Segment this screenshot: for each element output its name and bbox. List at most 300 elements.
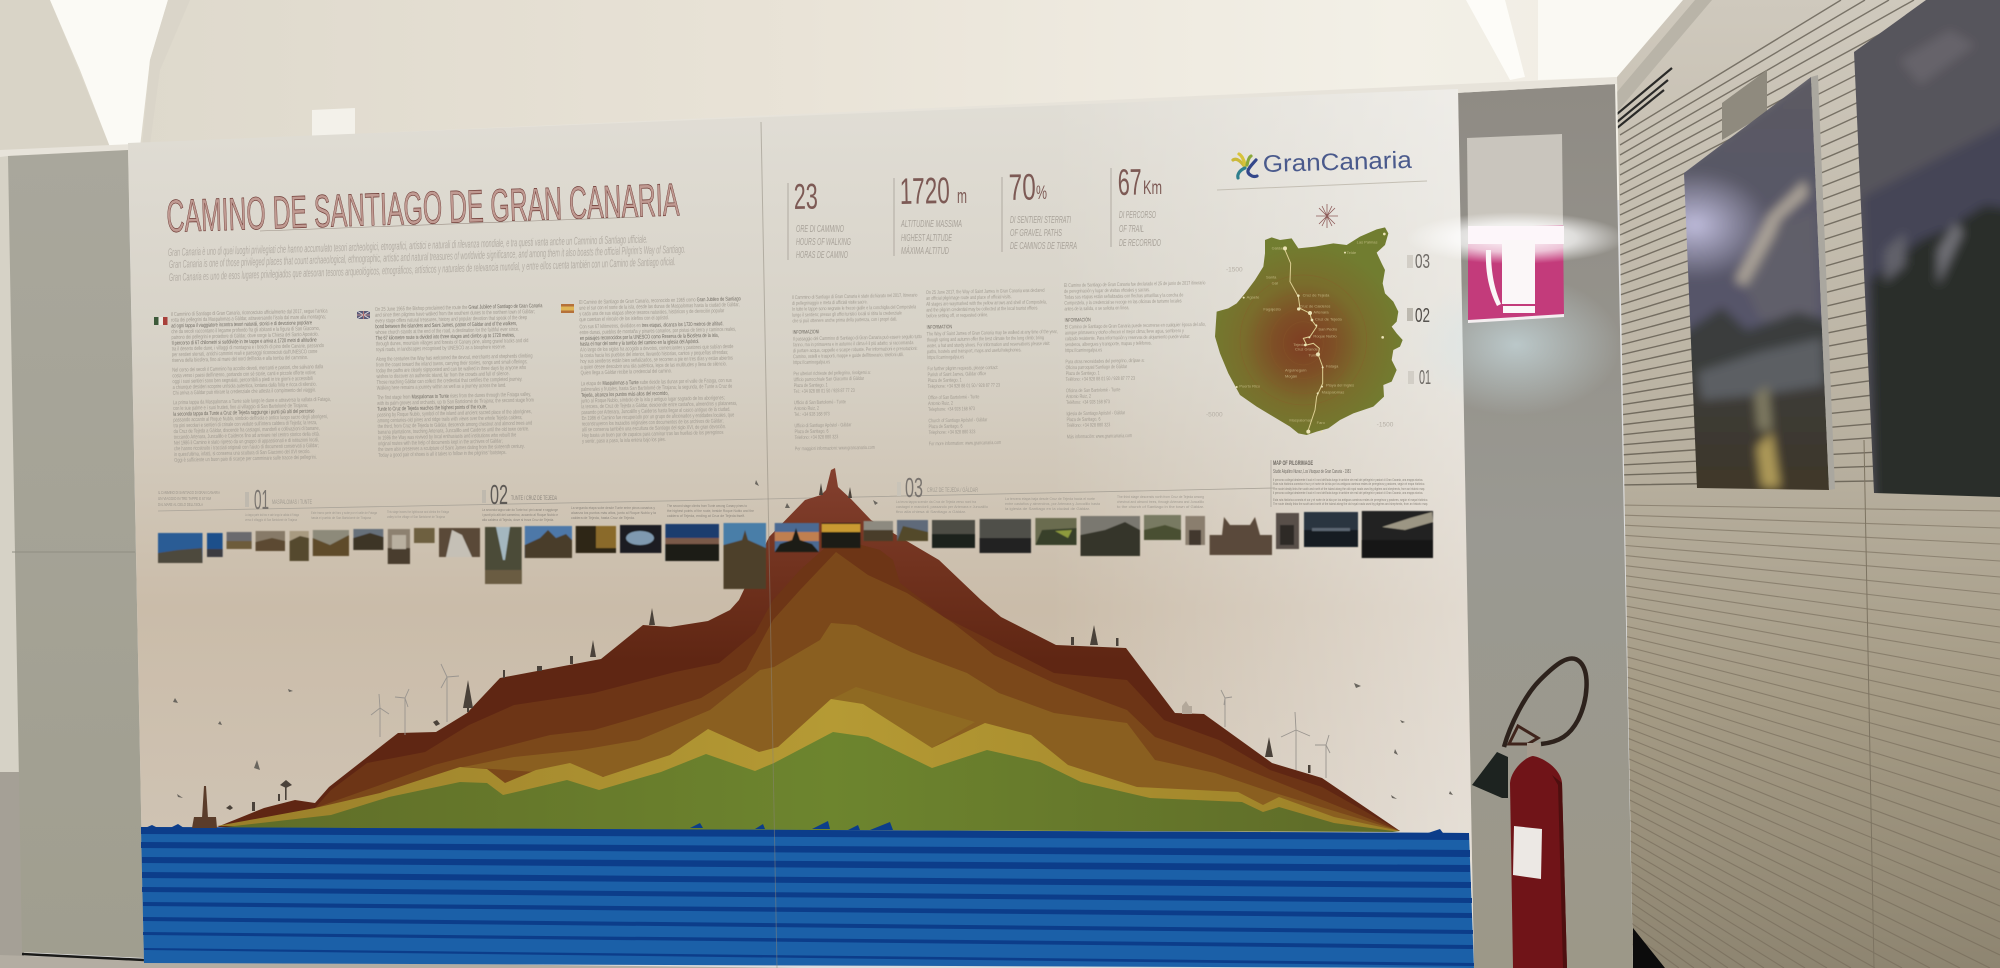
text column: info Italian: Tel.: +34 928 168 973 <box>794 411 830 417</box>
marker 01: 01 <box>1419 367 1431 389</box>
label <box>1513 826 1542 879</box>
photo 21 <box>932 520 975 548</box>
layer: brown band 2 <box>315 538 1400 831</box>
place names: Tunte <box>1308 353 1319 358</box>
text column: Spanish: La etapa de Maspalomas a Tunte sube desde las dunas por el valle de Fataga, con sus <box>581 378 732 388</box>
place names: Arguineguín <box>1285 368 1306 373</box>
place names: Mogán <box>1285 373 1297 378</box>
credits block: map of pilgrimage: The route ideally links the south and north of the island along the old royal roads used by pilgrims and shepherds, from an historic map. <box>1273 502 1428 506</box>
stage 01 header: verso il villaggio di San Bartolomé de Tirajana <box>245 518 297 522</box>
text column: info English: before setting off, or requested online. <box>926 312 988 319</box>
text column: English: In 1986 the Way was revived by local enthusiasts and institutions who rebuilt the <box>378 432 517 442</box>
text column: info Spanish: Oficina de San Bartolomé - Tunte <box>1066 387 1121 393</box>
text column: info Italian: Telefono: +34 928 880 323 <box>795 434 839 440</box>
place names: Agaete <box>1247 294 1260 299</box>
stage 02 header: alcanza los puntos más altos, junto al Roque Nublo y la <box>571 511 656 515</box>
stat: 23 hours of walking: HOURS OF WALKING <box>796 237 851 248</box>
cylinder body <box>1510 756 1567 968</box>
text column: info Spanish: calzado resistente. Para información y reservas de alojamiento puede visitar: <box>1065 333 1190 341</box>
text column: Spanish: y sentir, paso a paso, la isla entera bajo los pies. <box>582 436 666 445</box>
text column: Spanish: Tejeda, alcanza los puntos más altos del recorrido, <box>581 390 669 399</box>
photo 2 <box>207 533 223 557</box>
stat: 1720 m highest altitude: HIGHEST ALTITUDE <box>901 233 952 244</box>
text column: info English: On 25 June 2017, the Way of Saint James in Gran Canaria was declared <box>926 287 1045 295</box>
painting: left canvas <box>1684 75 1835 490</box>
stage 03 header: The third stage descends north from Cruz de Tejeda among <box>1117 495 1204 499</box>
stat: 1720 m highest altitude: 1720 <box>899 170 950 212</box>
text column: info English: Telephone: +34 928 88 01 50 / 928 87 77 23 <box>928 382 1001 389</box>
place names: Santa <box>1266 274 1277 279</box>
text column: info Spanish: Iglesia de Santiago Apóstol - Gáldar <box>1066 410 1126 416</box>
stage 03 header: la iglesia de Santiago en la ciudad de Gáldar. <box>1005 507 1090 511</box>
waves <box>145 821 1443 833</box>
text column: Spanish: entre dunas, pueblos de montaña y pinares canarios, por pistas de tierra y caminos reales, <box>580 326 736 337</box>
trees and figures on the ridge <box>226 483 1310 811</box>
text column: info English: though spring and autumn offer the best climate for the long climb; bring <box>927 335 1044 343</box>
text column: Italian: Il Cammino di Santiago di Gran Canaria, riconosciuto ufficialmente dal 2017, segue l'antica <box>171 308 328 318</box>
text column: Spanish: palmerales y frutales, hasta San Bartolomé de Tirajana; la segunda, de Tunte a Cruz de <box>581 383 733 393</box>
text column: Spanish: junto al Roque Nublo, símbolo de la isla y antiguo lugar sagrado de los aborígenes; <box>580 395 725 405</box>
text column: Spanish: Hoy basta un buen par de zapatos para caminar tras las huellas de los peregrinos <box>582 429 724 439</box>
photo 24 <box>1080 516 1140 556</box>
credits block: map of pilgrimage: Il percorso collega idealmente il sud e il nord dell'isola lungo le antiche vie reali dei pellegrini e pastori di Gran Canaria, una mappa storica. <box>1273 491 1423 495</box>
text column: Spanish: une el sur con el norte de la isla, desde las dunas de Maspalomas hasta la ciudad de Gáldar, <box>579 302 740 312</box>
photo 6 <box>313 530 349 556</box>
intro text: three languages: Gran Canaria es uno de esos lugares privilegiados que atesoran tesoros arqueológicos, etnográficos, artísticos y naturales de relevancia mundial, y entre ellos cuenta también con un Camino de Santiago oficial. <box>169 256 676 284</box>
text column: Spanish: la tercera, de Cruz de Tejeda a Gáldar, desciende entre castaños, almendros y plataneras, <box>581 400 737 411</box>
text column: Spanish: Quien llega a Gáldar recibe la credencial del camino. <box>580 368 672 377</box>
panel seam <box>761 122 777 968</box>
place names: Telde <box>1347 250 1357 255</box>
text column: Italian: toccando Artenara, Juncalillo e Caideros fino ad arrivare nel centro storico della città. <box>174 431 320 441</box>
stage 03 header: to the church of Santiago in the town of Gáldar. <box>1117 505 1204 509</box>
canvas side edge <box>1811 75 1835 490</box>
photo 30 <box>1362 511 1433 558</box>
flag: Spain <box>561 304 574 313</box>
text column: Italian: per sentieri sterrati, antichi cammini reali e paesaggi riconosciuti dall'UNESCO come <box>172 348 318 359</box>
photo 19 <box>864 521 893 541</box>
place names: Cruz Grande <box>1295 347 1319 352</box>
text column: English: passing by Roque Nublo, symbol of the island and ancient sacred place of the aborigines, <box>377 408 532 419</box>
place names: Puerto Rico <box>1239 384 1261 389</box>
place names: Tejeda <box>1293 342 1306 347</box>
right slatted wall <box>1615 0 2000 968</box>
photo 22 <box>980 519 1031 553</box>
text column: info English: INFORMATION <box>927 324 952 330</box>
photo 12 <box>525 526 572 558</box>
stage 02 header: La segunda etapa sube desde Tunte entre pinos canarios y <box>571 506 655 510</box>
stage 02 header: La seconda tappa sale da Tunte tra i pini canari e raggiunge <box>482 508 558 512</box>
stage 02 header: 02 <box>490 479 508 510</box>
timeline intro text: UN VIAGGIO IN TRE TAPPE E 67 KM <box>158 496 211 501</box>
text column: Italian: costa verso i paesi dell'interno, portando con sé storie, canti e piccole offerte votive; <box>172 370 316 380</box>
stage 03 header: CRUZ DE TEJEDA / GÁLDAR <box>927 487 978 494</box>
text column: info English: Office of San Bartolomé - Tunte <box>928 394 980 400</box>
stage 02 header: i punti più alti del cammino, accanto al Roque Nublo e <box>482 513 558 517</box>
text column: Italian: ad ogni tappa il viaggiatore incontra tesori naturali, storici e di devozione popolare <box>171 320 312 330</box>
text column: info Italian: Per ulteriori richieste del pellegrino, rivolgersi a: <box>793 369 871 377</box>
text column: Italian: La prima tappa da Maspalomas a Tunte sale lungo le dune e attraversa la vallata di Fataga, <box>173 396 331 407</box>
stage 02 header: caldera de Tejeda, hasta Cruz de Tejeda. <box>571 516 635 520</box>
text column: English: royal roads, in landscapes recognised by UNESCO as a biosphere reserve. <box>376 344 506 354</box>
wind turbines <box>371 664 1330 778</box>
stat: 67 km of trail: DI PERCORSO <box>1119 210 1156 221</box>
place names: San Pedro <box>1318 327 1338 332</box>
place names: Roque Nublo <box>1313 333 1337 338</box>
credits block: map of pilgrimage: MAP OF PILGRIMAGE <box>1273 461 1313 467</box>
text column: info English: Telephone: +34 928 168 973 <box>928 406 975 412</box>
stage 03 header: castagni e mandorli, passando per Artenara e Juncalillo <box>896 505 988 509</box>
layer: brown band 4 <box>463 623 1400 831</box>
text column: info Italian: Ufficio di Santiago Apóstol - Gáldar <box>794 422 852 428</box>
photo 27 <box>1210 517 1272 555</box>
horn <box>1472 752 1508 798</box>
text column: Spanish: allí se conserva también una escultura de Santiago del siglo XVI, de gran devoción. <box>582 424 726 434</box>
text column: Italian: con le sue palme e i suoi frutteti, fino al villaggio di San Bartolomé de Tirajana; <box>173 402 308 412</box>
text column: info Italian: In tutte le tappe sono segnate le frecce gialle e la conchiglia del Compostela <box>792 304 917 312</box>
photo 10 <box>439 528 480 557</box>
text column: Italian: rotta dei pellegrini da Maspalomas a Gáldar, attraversando l'isola dal mare alla montagna; <box>171 314 326 324</box>
text column: info Italian: che si può ottenere anche prima della partenza, con i propri dati. <box>792 316 897 324</box>
credits block: map of pilgrimage <box>1271 460 1428 507</box>
stage 03 header: entre castaños y almendros, por Artenara y Juncalillo hasta <box>1005 502 1100 506</box>
church on the ridge <box>1182 701 1192 714</box>
stage 01 header: La tappa parte dal faro e sale lungo la vallata di Fataga <box>245 513 299 517</box>
intro text: three languages: Gran Canaria is one of those privileged places that count archaeological, ethnographic, artistic and natural treasures of worldwide significance, and among them it also boasts the official Pilgrim's Way of Santiago. <box>169 244 686 271</box>
text column: English: Tunte to Cruz de Tejeda reaches the highest points of the route, <box>377 404 487 413</box>
text column: Italian: Chi arriva a Gáldar può ritirare la credenziale che attesta il compimento del viaggio. <box>173 387 316 397</box>
text column: Spanish: hoy sus senderos están bien señalizados, se recorren a pie en tres días y están abiertos <box>580 355 734 365</box>
stage markers <box>1407 251 1431 389</box>
island map <box>1206 227 1403 435</box>
text column: English: with its palm groves and orchards, up to San Bartolomé de Tirajana; the second stage from <box>377 397 534 407</box>
photo 28 <box>1276 513 1299 549</box>
stat: 23 hours of walking: 23 <box>793 176 818 217</box>
place names: Playa del Inglés <box>1326 383 1354 388</box>
stage 01 header: MASPALOMAS / TUNTE <box>272 500 312 506</box>
text column: Italian: Oggi è sufficiente un buon paio di scarpe per camminare sulle tracce dei pellegrini. <box>174 454 317 464</box>
mountain profile chart <box>217 468 1400 832</box>
text column: info English: The Way of Saint James of Gran Canaria may be walked at any time of the year, <box>927 328 1058 337</box>
text column: info English: an official pilgrimage route and place of official visits. <box>926 294 1012 301</box>
marker 03: 03 <box>1415 251 1430 273</box>
credits block: map of pilgrimage: Il percorso collega idealmente il sud e il nord dell'isola lungo le antiche vie reali dei pellegrini e pastori di Gran Canaria, una mappa storica. <box>1273 478 1423 482</box>
text column: info Italian: di portare acqua, cappello e scarpe robuste. Per informazioni e prenotazioni: <box>793 345 918 353</box>
text column: info Spanish: Más información: www.grancanaria.com <box>1067 433 1132 440</box>
photo strip <box>158 511 1433 589</box>
photo 29 <box>1304 512 1358 547</box>
stage 01 header: hasta el pueblo de San Bartolomé de Tirajana <box>311 516 371 520</box>
stage 02 header: TUNTE / CRUZ DE TEJEDA <box>511 496 557 502</box>
text column: English: through dunes, mountain villages and forests of Canary pine, along gravel tracks and old <box>376 337 529 348</box>
extinguisher pictogram <box>1486 240 1535 313</box>
stat: 1720 m highest altitude: m <box>957 186 967 208</box>
text column: English <box>375 303 547 459</box>
text column: info English: and the pilgrim credential may be collected at the local tourist offices <box>926 305 1038 313</box>
text column: info Italian: Il Cammino di Santiago di Gran Canaria è stato dichiarato nel 2017, Itinerario <box>792 292 918 300</box>
text column: English: wishes to discover an authentic island, far from the crowds and full of silence. <box>376 371 510 380</box>
text column: Italian: Il percorso di 67 chilometri si suddivide in tre tappe e arriva a 1720 metri di altitudine <box>172 337 317 347</box>
icon: swirl <box>1233 154 1257 178</box>
text column: info Italian: Camino, ostelli e trasporti, mappe e guide dell'itinerario, telefoni utili. <box>793 351 904 359</box>
icon: compass rose <box>1316 204 1338 228</box>
sea depth labels: -1500 <box>1377 422 1394 429</box>
text column: info Italian: Per maggiori informazioni: www.grancanaria.com <box>795 444 875 452</box>
text column: Spanish: que cuentan el vínculo de los isleños con el apóstol. <box>579 315 669 324</box>
text column: info Italian: Il passaggio del Cammino di Santiago di Gran Canaria può essere seguito tutto <box>793 333 922 342</box>
hose <box>1504 658 1587 747</box>
text column: Spanish: hasta el mar del norte y la tumba del camino en la iglesia del Apóstol. <box>580 338 700 348</box>
title underline <box>260 217 640 231</box>
text column: English: The first stage from Maspalomas to Tunte rises from the dunes through the Fataga valley, <box>377 392 531 402</box>
text column: Italian: tra pini secolari e sentieri di crinale con vedute sull'intera caldera di Tejeda; la terza, <box>173 419 317 430</box>
stage 03 header: 03 <box>905 472 923 503</box>
timeline intro text: DAL MARE AL CIELO DELL'ISOLA <box>158 502 204 507</box>
text column: Italian: che hanno ricostruito i tracciati originali con l'aiuto di documenti conservati a Gáldar; <box>174 442 319 453</box>
place names: Cruz de Tejeda <box>1315 317 1343 322</box>
photo 8 <box>388 529 410 564</box>
photo 20 <box>897 520 928 541</box>
stat: 23 hours of walking: ORE DI CAMMINO <box>796 224 844 235</box>
intro text: three languages: Gran Canaria è uno di quei luoghi privilegiati che hanno accumulato tesori archeologici, etnografici, artistici e naturali di rilevanza mondiale, e tra questi vanta anche un Cammino di Santiago ufficiale. <box>168 234 648 259</box>
birds <box>173 480 1453 799</box>
stat: 70% gravel paths: DE CAMINOS DE TIERRA <box>1010 241 1077 252</box>
place names: Cruz de Tejeda <box>1303 293 1330 298</box>
text column: Spanish: en paisajes reconocidos por la UNESCO como Reserva de la Biosfera de la isla, <box>580 332 719 342</box>
text column: info Spanish: INFORMACIÓN <box>1065 316 1091 323</box>
sea depth labels <box>1206 267 1394 429</box>
place names: Fataga <box>1326 363 1339 368</box>
text column: info English: All stages are waymarked with the yellow arrows and shell of Compostela, <box>926 299 1047 307</box>
timeline intro text: IL CAMMINO DI SANTIAGO DI GRAN CANARIA <box>158 490 221 495</box>
text column: info Spanish: Teléfono: +34 928 168 973 <box>1066 399 1110 405</box>
stat: 1720 m highest altitude: MÁXIMA ALTITUD <box>901 244 949 257</box>
text column: English: today the paths are clearly signposted and can be walked in three days by anyone who <box>376 364 527 375</box>
text column: info Italian: Antonio Ruiz, 2 <box>794 405 819 411</box>
stage 02 header <box>482 479 754 522</box>
flag: United Kingdom <box>357 311 370 319</box>
stat: 70% gravel paths: DI SENTIERI STERRATI <box>1010 215 1071 226</box>
stat: 67 km of trail: OF TRAIL <box>1119 224 1144 235</box>
place names: Artenara <box>1313 309 1329 314</box>
text column: Spanish: y cada una de sus etapas ofrece tesoros naturales, históricos y de devoción popular <box>579 308 725 318</box>
stage 01 header: This stage leaves the lighthouse and climbs the Fataga <box>387 510 449 514</box>
photo 9 <box>414 528 435 543</box>
text column: English: among centuries-old pines and ridge trails with views over the whole Tejeda caldera; <box>377 414 523 425</box>
text column: Spanish: Con sus 67 kilómetros, divididos en tres etapas, alcanza los 1720 metros de altitud, <box>579 322 724 331</box>
photo 3 <box>227 532 252 549</box>
text column: info Italian: lungo il sentiero; presso gli uffici turistici locali si ritira la credenziale <box>792 310 902 318</box>
marker 02: 02 <box>1415 305 1430 327</box>
logo: Gran Canaria <box>1217 147 1427 190</box>
layer: yellow band <box>217 699 1400 831</box>
stage 01 header: Este tramo parte del faro y sube por el valle de Fataga <box>311 511 377 515</box>
stage 03 header <box>896 472 1204 514</box>
text column: info English: Plaza de Santiago, 1 <box>928 377 962 383</box>
stage 02 header: the highest points of the route, beside Roque Nublo and the <box>667 509 754 513</box>
text column: Italian: passando accanto al Roque Nublo, simbolo dell'isola e antico luogo sacro degli aborigeni, <box>173 413 328 424</box>
photo 23 <box>1035 518 1076 545</box>
stage 03 header: La terza tappa scende da Cruz de Tejeda verso nord tra <box>896 500 976 504</box>
text column: info English: Plaza de Santiago, 6 <box>928 423 963 429</box>
text column: English: Today a good pair of shoes is all it takes to follow in the pilgrims' footsteps. <box>378 449 507 459</box>
credits block: map of pilgrimage: The route ideally links the south and north of the island along the old royal roads used by pilgrims and shepherds, from an historic map. <box>1273 487 1425 491</box>
text column: Italian: a chiunque desideri scoprire un'isola autentica, lontana dalla folla e ricca di silenzio. <box>173 381 317 391</box>
text column: info Italian: Plaza de Santiago, 1 <box>794 382 828 388</box>
text column: English: Walking here remains a journey within as well as a journey across the land. <box>377 382 506 392</box>
text column: info English: water, a hat and sturdy shoes. For information and reservations please visit: <box>927 340 1050 348</box>
timeline rule <box>158 488 1275 511</box>
text column: English: every stage offers natural treasures, history and popular devotion that speak of the deep <box>375 314 528 325</box>
text column: info Spanish: Plaza de Santiago, 1 <box>1066 370 1100 376</box>
ceiling <box>0 0 2000 200</box>
text column: info English: paths, hostels and transport, maps and useful telephones. <box>927 347 1022 354</box>
text column: English: bond between the islanders and Saint James, patron of Gáldar and of the walkers, <box>375 320 517 331</box>
photo 4 <box>256 531 285 551</box>
photo 15 <box>665 524 719 561</box>
stat: 1720 m highest altitude: ALTITUDINE MASSIMA <box>900 219 962 230</box>
text column: info Italian: Ufficio parrocchiale San Giacomo di Gáldar <box>793 375 864 382</box>
text column: info Spanish: El Camino de Santiago de Gran Canaria puede recorrerse en cualquier época del año, <box>1065 321 1206 330</box>
painting: right canvas <box>1854 0 2000 497</box>
text column: info Spanish: senderos, albergues y transporte, mapas y teléfonos. <box>1065 340 1152 347</box>
text column: English: whose church stands at the end of the road, a destination for the faithful ever since. <box>375 326 519 336</box>
stage 01 header: valley to the village of San Bartolomé de Tirajana <box>387 515 445 519</box>
text column: info Spanish: aunque primavera y otoño ofrecen el mejor clima; lleve agua, sombrero y <box>1065 328 1184 336</box>
text column: info Spanish: Teléfono: +34 928 880 323 <box>1067 422 1111 428</box>
intro text: three languages <box>168 234 686 284</box>
text column: English: original routes with the help of documents kept in the archives of Gáldar; <box>378 438 503 448</box>
timeline intro text <box>158 490 221 507</box>
place names: Gál <box>1272 280 1278 285</box>
text column: Italian: tra il deserto delle dune, i villaggi di montagna e i boschi di pino delle Canarie, passando <box>172 342 324 353</box>
text column: info English: Antonio Ruiz, 2 <box>928 400 953 406</box>
place names: Maspalomas <box>1322 389 1344 394</box>
text column: English: the town also preserves a sculpture of Saint James dating from the sixteenth century. <box>378 443 525 453</box>
stage 01 header: 01 <box>254 484 269 515</box>
text column: English: from the coast toward the inland towns, carrying their stories, songs and small offerings; <box>376 359 528 369</box>
text column: Italian: Nel corso dei secoli il Cammino ha accolto devoti, mercanti e pastori, che salivano dalla <box>172 364 323 374</box>
photo 1 <box>158 533 202 563</box>
text column: info Italian: https://caminogalpa.es <box>793 359 831 365</box>
place names: Faro <box>1317 420 1326 425</box>
panel: main exhibition board <box>128 89 1474 968</box>
logo: Gran Canaria: GranCanaria <box>1262 147 1413 178</box>
sea <box>141 821 1474 968</box>
text column: English: On 25 June 1965 the Bishop proclaimed the route the Great Jubilee of Santiago de Gran Canaria <box>375 304 542 313</box>
photo 11 <box>485 527 522 584</box>
place names <box>1239 239 1377 425</box>
text column: Spanish: El Camino de Santiago de Gran Canaria, reconocido en 1965 como Gran Jubileo de Santiago <box>579 297 741 306</box>
text column: info English: Church of Santiago Apóstol - Gáldar <box>928 417 988 423</box>
flag: Italy <box>154 317 168 325</box>
left wall and floor <box>0 150 800 968</box>
stat: 67 km of trail: Km <box>1143 178 1162 199</box>
credits block: map of pilgrimage: Esta ruta histórica conecta el sur y el norte de la isla por los antiguos caminos reales de peregrinos y pastores, según el mapa histórico. <box>1273 498 1428 502</box>
text column: Spanish: la costa hacia los pueblos del interior, llevando historias, cantos y pequeñas ofrendas; <box>580 349 728 360</box>
text column: Italian <box>171 308 333 464</box>
title: CAMINO DE SANTIAGO DE GRAN CANARIA <box>166 173 680 242</box>
text column: info English: For further pilgrim requests, please contact: <box>927 364 998 372</box>
photo 13 <box>576 526 616 553</box>
layer: green base <box>217 732 1400 832</box>
text column: Italian: che da secoli raccontano il legame profondo fra gli abitanti e la figura di San Giacomo, <box>171 325 320 336</box>
stage 03 header: fino alla chiesa di Santiago a Gáldar. <box>896 510 966 514</box>
text column: Spanish: A lo largo de los siglos ha acogido a devotos, comerciantes y pastores que subían desde <box>580 343 734 354</box>
stage 03 header: chestnut and almond trees, through Artenara and Juncalillo <box>1117 500 1204 504</box>
layer: dark brown summit <box>217 468 1400 831</box>
stat: 67 km of trail <box>1111 162 1162 249</box>
photo 17 <box>775 523 819 552</box>
place names: Cruz de Caideros <box>1299 304 1330 309</box>
stage 03 header: La tercera etapa baja desde Cruz de Tejeda hacia el norte <box>1005 497 1095 501</box>
text column: info Spanish: El Camino de Santiago de Gran Canaria fue declarado el 25 de junio de 2017 itinerario <box>1064 280 1206 288</box>
stat: 23 hours of walking <box>788 176 851 261</box>
place names: Gáldar <box>1272 245 1284 250</box>
trail <box>1285 250 1323 430</box>
stat: 70% gravel paths: 70 <box>1008 166 1036 208</box>
text column: info Italian: di pellegrinaggio e meta di ufficiali visite sacre. <box>792 299 868 306</box>
credits block: map of pilgrimage: Studio Alquilino Nunez, Los Vásquez de Gran Canaria - 1981 <box>1273 469 1351 475</box>
photo 18 <box>822 523 860 548</box>
text column: Spanish: En 1986 el Camino fue recuperado por un grupo de aficionados y entidades locales, que <box>582 412 735 422</box>
text column: Spanish: reconstruyeron los trazados originales con documentos de los archivos de Gáldar; <box>582 418 724 428</box>
text column: info Spanish: Compostela, y la credencial se recoge en las oficinas de turismo locales <box>1064 298 1182 306</box>
stage 01 header <box>245 484 449 522</box>
sign upper plate <box>1467 134 1563 229</box>
text column: info English: For more information: www.grancanaria.com <box>929 439 1001 447</box>
text column: info Italian: Ufficio di San Bartolomé - Tunte <box>794 399 846 405</box>
layer: ochre wedge <box>830 687 975 748</box>
text column: info Spanish <box>1064 280 1209 440</box>
sea depth labels: -5000 <box>1206 412 1223 419</box>
stage 02 header: alla caldera di Tejeda, dove si trova Cruz de Tejeda. <box>482 518 554 522</box>
text column: info Spanish: Para otras necesidades del peregrino, diríjase a: <box>1065 357 1145 365</box>
photo 26 <box>1185 516 1205 545</box>
text column: info English <box>926 287 1061 447</box>
layer: brown band 3 <box>315 552 1400 831</box>
valve <box>1509 726 1538 744</box>
text column: info Italian: Plaza de Santiago, 6 <box>794 428 829 434</box>
text column: info Spanish: https://caminogalpa.es <box>1065 347 1103 353</box>
fire extinguisher <box>1472 658 1587 968</box>
text column: info Spanish: Antonio Ruiz, 2 <box>1066 393 1091 399</box>
sign lower pink plate <box>1468 225 1564 322</box>
photo 25 <box>1144 515 1181 540</box>
right grey column <box>1456 84 1633 968</box>
text column: Italian: da Cruz de Tejeda a Gáldar, discende fra castagni, mandorli e coltivazioni di banane, <box>174 425 320 435</box>
text column: info Spanish: antes de la salida, o se solicita en línea. <box>1064 305 1129 312</box>
stage 02 header: The second stage climbs from Tunte among Canary pines to <box>667 504 747 508</box>
text column: Spanish: pasando por Artenara, Juncalillo y Caideros hasta llegar al casco antiguo de la ciudad. <box>581 406 731 416</box>
text column: info Italian: Tel.: +34 928 88 01 50 / 928 87 77 23 <box>794 387 855 394</box>
text column: English: Along the centuries the Way has welcomed the devout, merchants and shepherds climbing <box>376 353 533 363</box>
place names: Las Palmas <box>1357 239 1377 244</box>
lighthouse <box>192 786 217 828</box>
photo 14 <box>620 525 661 553</box>
text column: info English: Parish of Saint James, Gáldar office <box>927 371 987 377</box>
text column: info Italian <box>792 292 925 452</box>
text column: info Spanish: de peregrinación y lugar de visitas oficiales y sacras. <box>1064 287 1150 294</box>
trail stops <box>1236 233 1386 434</box>
photo 16 <box>724 523 766 589</box>
text column: Italian: Nel 1986 il Camino è stato ripreso da un gruppo di appassionati e di istituzioni locali, <box>174 437 319 447</box>
text column: info English: https://caminogalpa.es <box>927 354 965 360</box>
text column: Italian: in quest'ultima, infatti, si conserva una scultura di San Giacomo del XVI secolo. <box>174 448 310 458</box>
text column: info Italian: l'anno, ma in primavera e in autunno il clima è il più adatto; si raccomanda <box>793 340 914 348</box>
sign: fire extinguisher marker <box>1406 134 1626 415</box>
stat: 67 km of trail: 67 <box>1117 162 1142 203</box>
